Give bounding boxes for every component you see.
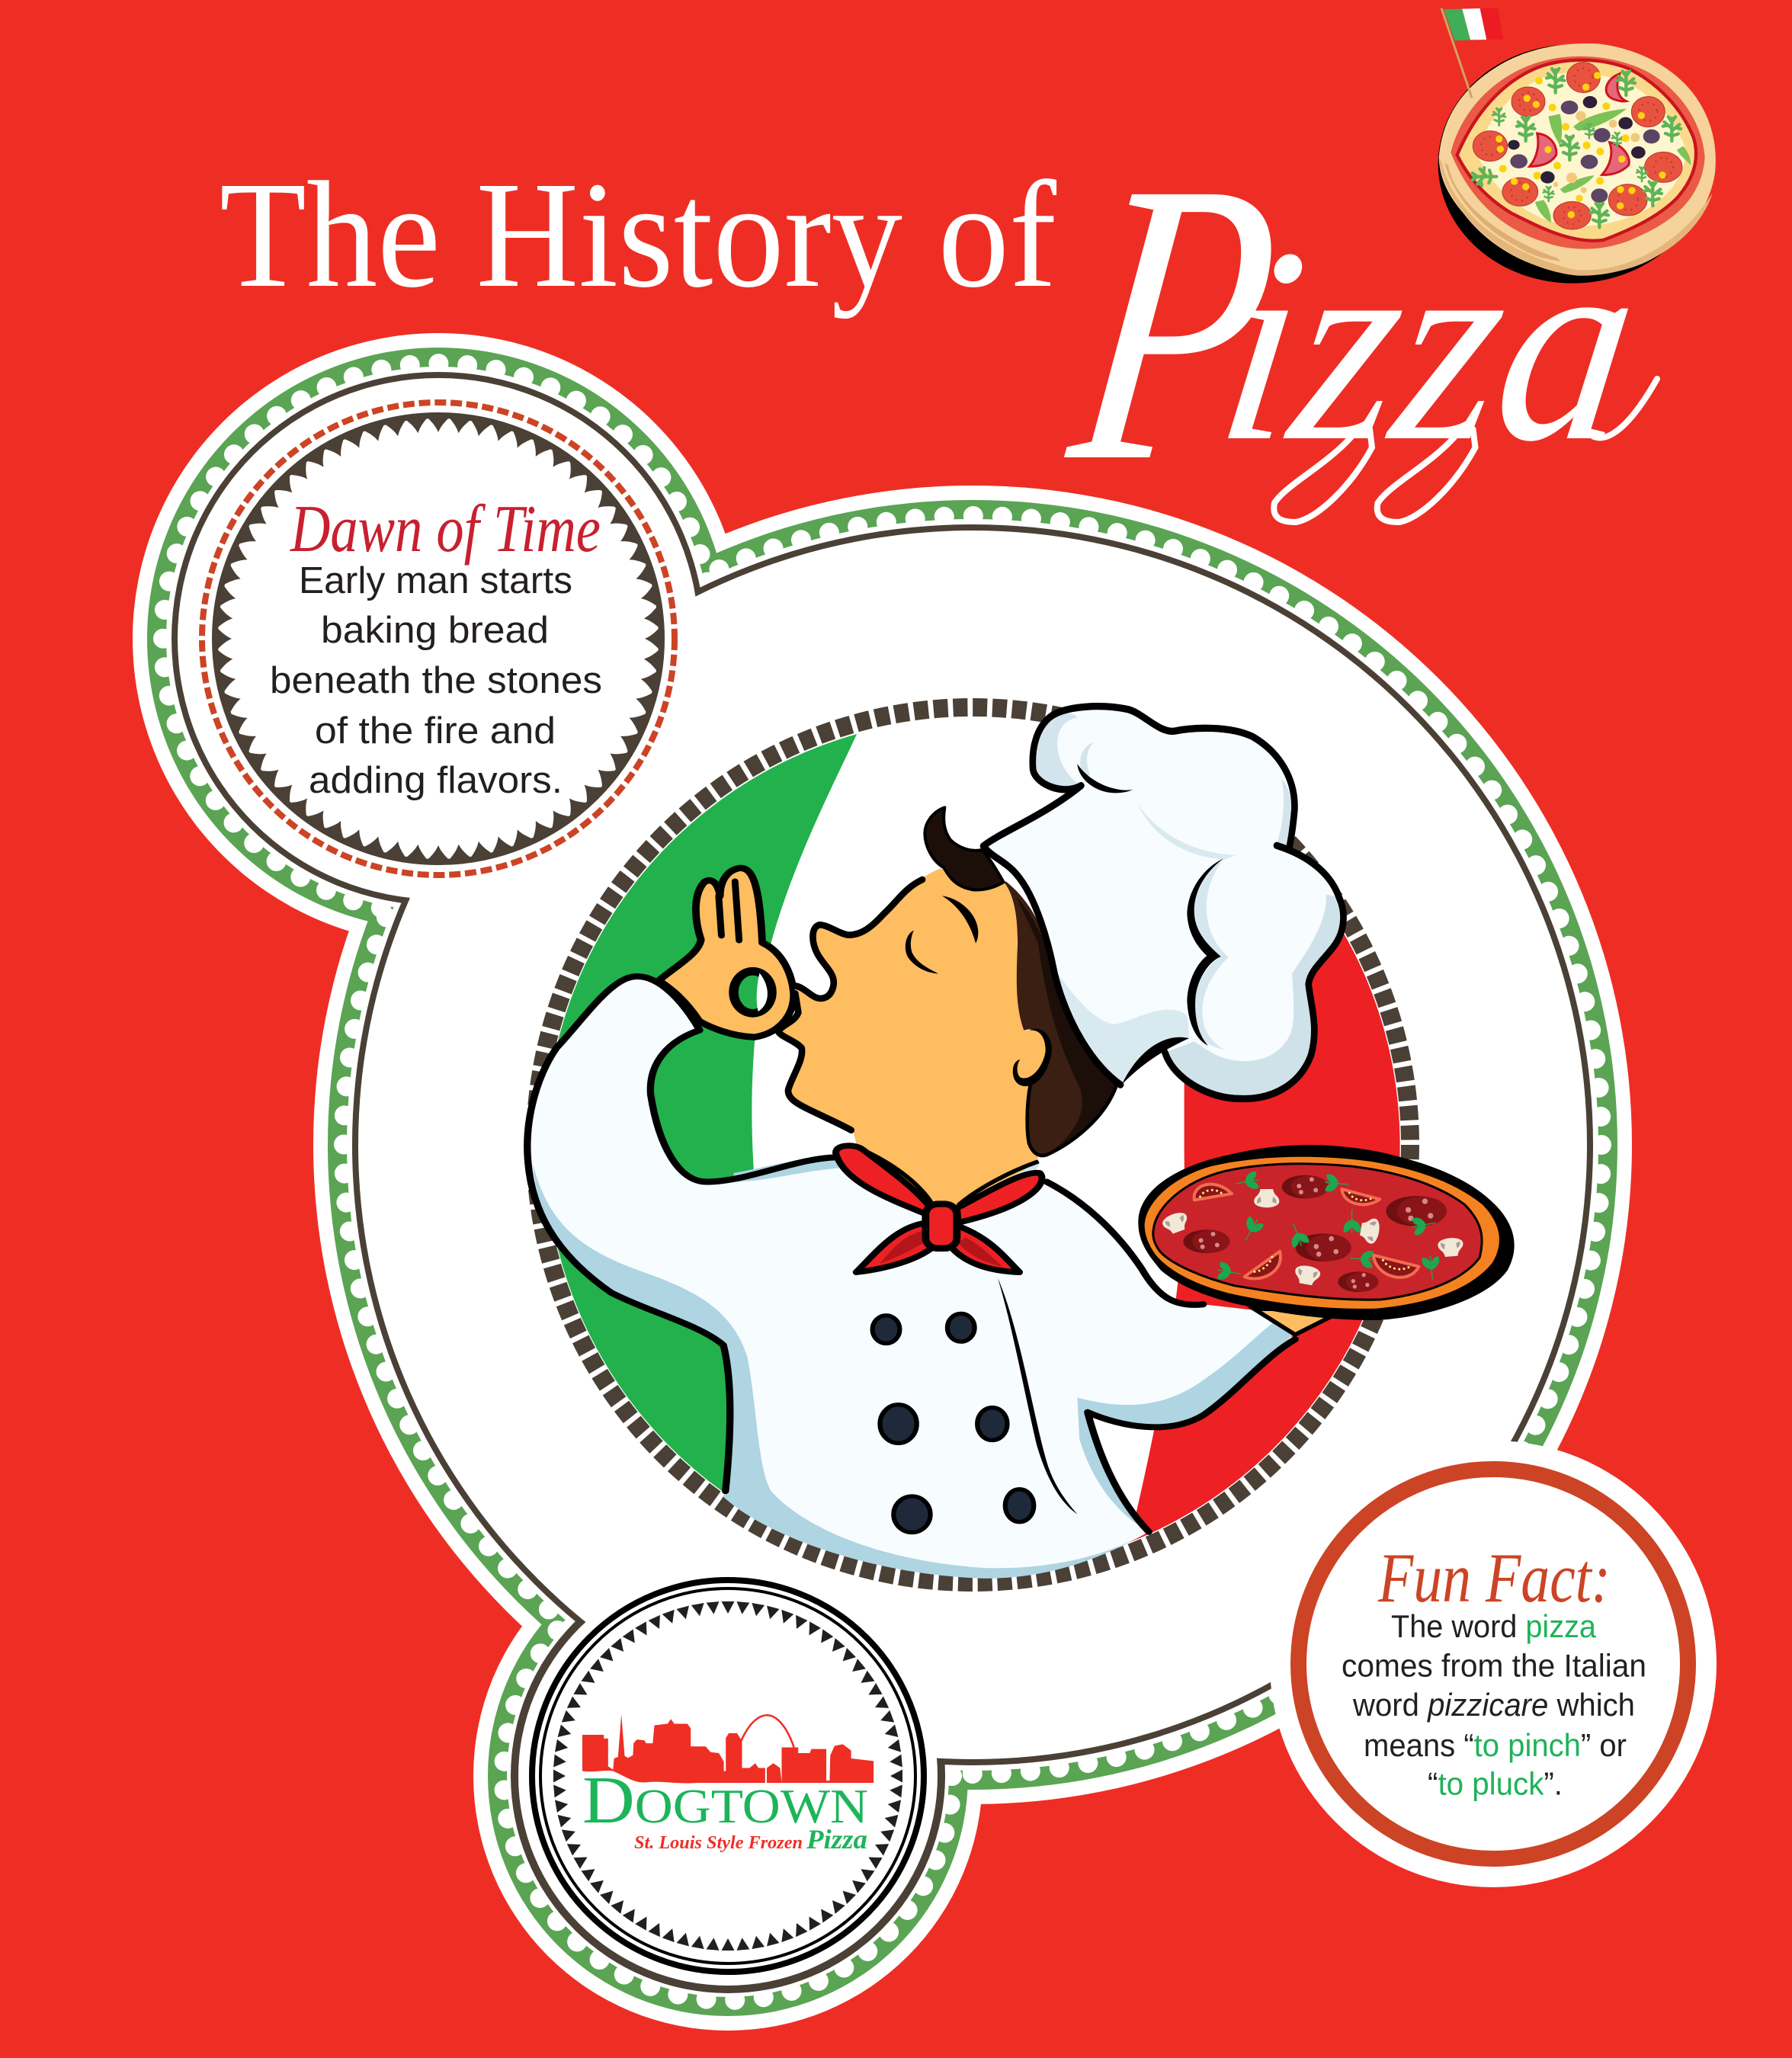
text: Dawn of Time body xyxy=(270,560,602,801)
chef hat xyxy=(983,707,1344,1099)
basil leaves xyxy=(1216,1172,1441,1282)
text: Fun Fact body: The word pizza xyxy=(1391,1608,1597,1644)
text: Fun Fact body xyxy=(1342,1608,1646,1802)
logo sawtooth ring xyxy=(502,1560,954,1992)
ring: striped chef medallion border xyxy=(535,707,1410,1582)
text: Dawn of Time body: adding flavors. xyxy=(309,760,563,801)
panel: Fun Fact xyxy=(1270,1441,1717,1887)
chef buttons xyxy=(873,1313,1034,1532)
title: Pizza: izza xyxy=(1205,191,1655,499)
heading: Dawn of Time: Dawn of Time xyxy=(290,492,601,566)
logo tagline: St. Louis Style Frozen xyxy=(634,1833,803,1853)
logo wordmark: DOGTOWN xyxy=(582,1764,868,1838)
hair xyxy=(925,807,1117,1156)
panel: Dogtown logo xyxy=(502,1560,954,1992)
pepperoni xyxy=(1183,1175,1447,1292)
tomato slices xyxy=(1194,1184,1419,1278)
chef neckerchief xyxy=(835,1146,1042,1272)
serrated ring xyxy=(173,373,704,904)
panel: Dawn of Time xyxy=(173,373,704,904)
text: Fun Fact body: means “to pinch” or xyxy=(1364,1727,1627,1763)
face xyxy=(777,868,1047,1212)
illustration: pizza with Italian flag xyxy=(1438,8,1716,284)
title: Pizza xyxy=(1050,100,1657,545)
text: Fun Fact body: “to pluck”. xyxy=(1428,1765,1563,1802)
chef pizza tray xyxy=(1138,1145,1515,1320)
illustration: chef kissing fingers and holding pizza xyxy=(495,686,1563,1601)
text: Dawn of Time body: Early man starts xyxy=(299,560,572,601)
chef head xyxy=(777,807,1117,1212)
panel: scalloped border outline xyxy=(133,333,1632,2031)
text: Dawn of Time body: of the fire and xyxy=(315,710,556,752)
logo St. Louis skyline xyxy=(582,1714,874,1783)
chef back hand under pizza xyxy=(1255,1309,1346,1335)
text: Dawn of Time body: beneath the stones xyxy=(270,660,602,701)
text: Fun Fact body: comes from the Italian xyxy=(1342,1648,1646,1683)
tricolor background xyxy=(558,734,1400,1544)
chef raised hand xyxy=(659,868,793,1037)
chef body xyxy=(527,976,1295,1579)
mushrooms xyxy=(1161,1189,1464,1287)
logo tagline Pizza: Pizza xyxy=(806,1824,867,1854)
title: The History of: The History of xyxy=(220,151,1056,319)
heading: Fun Fact: Fun Fact: xyxy=(1377,1539,1611,1617)
title: Pizza: P xyxy=(1050,100,1300,545)
text: Dawn of Time body: baking bread xyxy=(321,610,549,651)
text: Fun Fact body: word pizzicare which xyxy=(1352,1687,1635,1723)
